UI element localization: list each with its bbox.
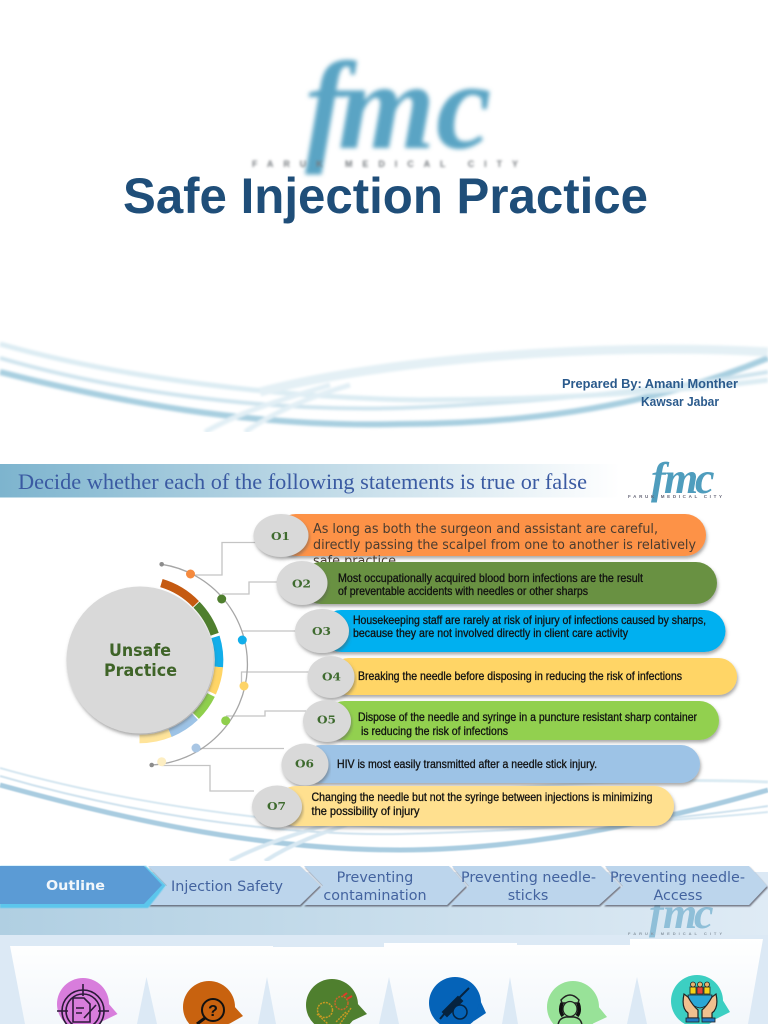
logo: fmc: f — [305, 38, 357, 176]
statement 02 — [276, 561, 717, 605]
chevron: Outline — [0, 866, 166, 908]
logo: fmc — [252, 38, 518, 176]
logo: small fmc — [628, 454, 722, 503]
statement 07: the possibility of injury — [312, 804, 420, 818]
statement 01: O1 — [271, 529, 290, 543]
statement 05: Dispose of the needle and syringe in a puncture resistant sharp container — [358, 710, 697, 724]
chevron: Injection Safety: Injection Safety — [171, 879, 284, 895]
statement 07: O7 — [267, 799, 286, 813]
chevron: Injection Safety — [148, 866, 320, 905]
chevron: Outline: Outline — [46, 878, 105, 894]
statement 07: Changing the needle but not the syringe between injections is minimizing — [312, 790, 652, 804]
chevron: Preventing needle-sticks: Preventing needle- — [461, 870, 596, 886]
logo: small fmc: FARUK MEDICAL CITY — [628, 494, 722, 499]
statement 03: O3 — [312, 624, 331, 638]
chevron: Preventing contamination: Preventing — [337, 870, 413, 886]
statement 04: Breaking the needle before disposing in reducing the risk of infections — [358, 669, 682, 683]
icon: gears in hands — [306, 979, 367, 1024]
header band — [0, 464, 620, 498]
logo: fmc: m — [338, 38, 435, 176]
logo: small fmc: f — [651, 454, 670, 503]
icon: hands holding globe — [671, 975, 730, 1024]
statement 05: is reducing the risk of infections — [361, 724, 508, 738]
white panels — [10, 939, 763, 1024]
presenters — [562, 376, 738, 409]
statement 03: Housekeeping staff are rarely at risk of injury of infections caused by sharps, — [353, 613, 706, 627]
logo: fmc: FARUK MEDICAL CITY — [252, 159, 518, 169]
statement 01 — [254, 514, 706, 569]
chevron: Preventing needle-sticks — [450, 866, 620, 905]
logo: faded fmc: FARUK MEDICAL CITY — [628, 931, 722, 936]
timeline dots — [157, 570, 248, 766]
chevron: Preventing needle-Access: Preventing needle- — [610, 870, 745, 886]
statement 06: O6 — [295, 756, 314, 770]
connector lines — [162, 542, 310, 791]
statement 05: O5 — [317, 712, 336, 726]
chevron: Preventing needle-sticks: sticks — [508, 888, 548, 904]
background waves — [0, 768, 768, 861]
logo: faded fmc: c — [694, 889, 714, 938]
logo: faded fmc: f — [649, 889, 668, 938]
logo: small fmc: m — [664, 454, 698, 503]
blue band — [0, 900, 768, 935]
chevron: Preventing needle-Access: Access — [654, 888, 702, 904]
statement 01: directly passing the scalpel from one to another is relatively — [313, 538, 696, 553]
statement 01: As long as both the surgeon and assistant are careful, — [313, 522, 658, 537]
panel: unsafe practice slide — [0, 454, 768, 861]
center circle: Practice — [104, 661, 177, 680]
presenters: Kawsar Jabar — [641, 394, 719, 409]
logo: fmc: c — [436, 38, 491, 176]
statement 01: safe practice — [313, 554, 396, 569]
icon: question magnifier: ? — [208, 1003, 218, 1020]
statement 03 — [295, 609, 726, 653]
chevron: Preventing contamination — [303, 866, 466, 905]
statement 02: Most occupationally acquired blood born infections are the result — [338, 571, 644, 585]
statement 07 — [252, 786, 674, 828]
panel: title slide — [0, 38, 768, 432]
panel: outline slide — [0, 866, 768, 1024]
logo: small fmc: c — [695, 454, 715, 503]
statement 06 — [282, 744, 700, 786]
icon: question magnifier — [183, 981, 243, 1024]
center circle: Unsafe — [109, 641, 171, 660]
chevron: Preventing needle-Access — [603, 866, 767, 905]
large thin arc — [149, 562, 247, 767]
heading: Decide whether each of the following statements is true or false — [18, 469, 587, 494]
statement 04 — [308, 656, 737, 698]
logo: faded fmc — [628, 889, 722, 938]
slide background — [0, 872, 768, 1024]
icon: nurse — [547, 981, 607, 1024]
title: Safe Injection Practice — [123, 168, 648, 224]
panel separators — [137, 977, 647, 1024]
center circle — [66, 586, 214, 734]
icon: target document — [57, 978, 118, 1024]
statement 06: HIV is most easily transmitted after a needle stick injury. — [337, 757, 597, 771]
logo: faded fmc: m — [663, 889, 697, 938]
statement 03: because they are not involved directly in client care activity — [353, 626, 628, 640]
statement 05 — [303, 700, 719, 742]
statement 02: O2 — [292, 576, 311, 590]
statement 02: of preventable accidents with needles or other sharps — [338, 584, 588, 598]
statement 04: O4 — [322, 670, 341, 684]
chevron: Preventing contamination: contamination — [323, 888, 427, 904]
presenters: Prepared By: Amani Monther — [562, 376, 738, 391]
icon: syringe — [429, 977, 486, 1024]
ring segments — [140, 583, 219, 739]
background waves — [0, 344, 768, 432]
